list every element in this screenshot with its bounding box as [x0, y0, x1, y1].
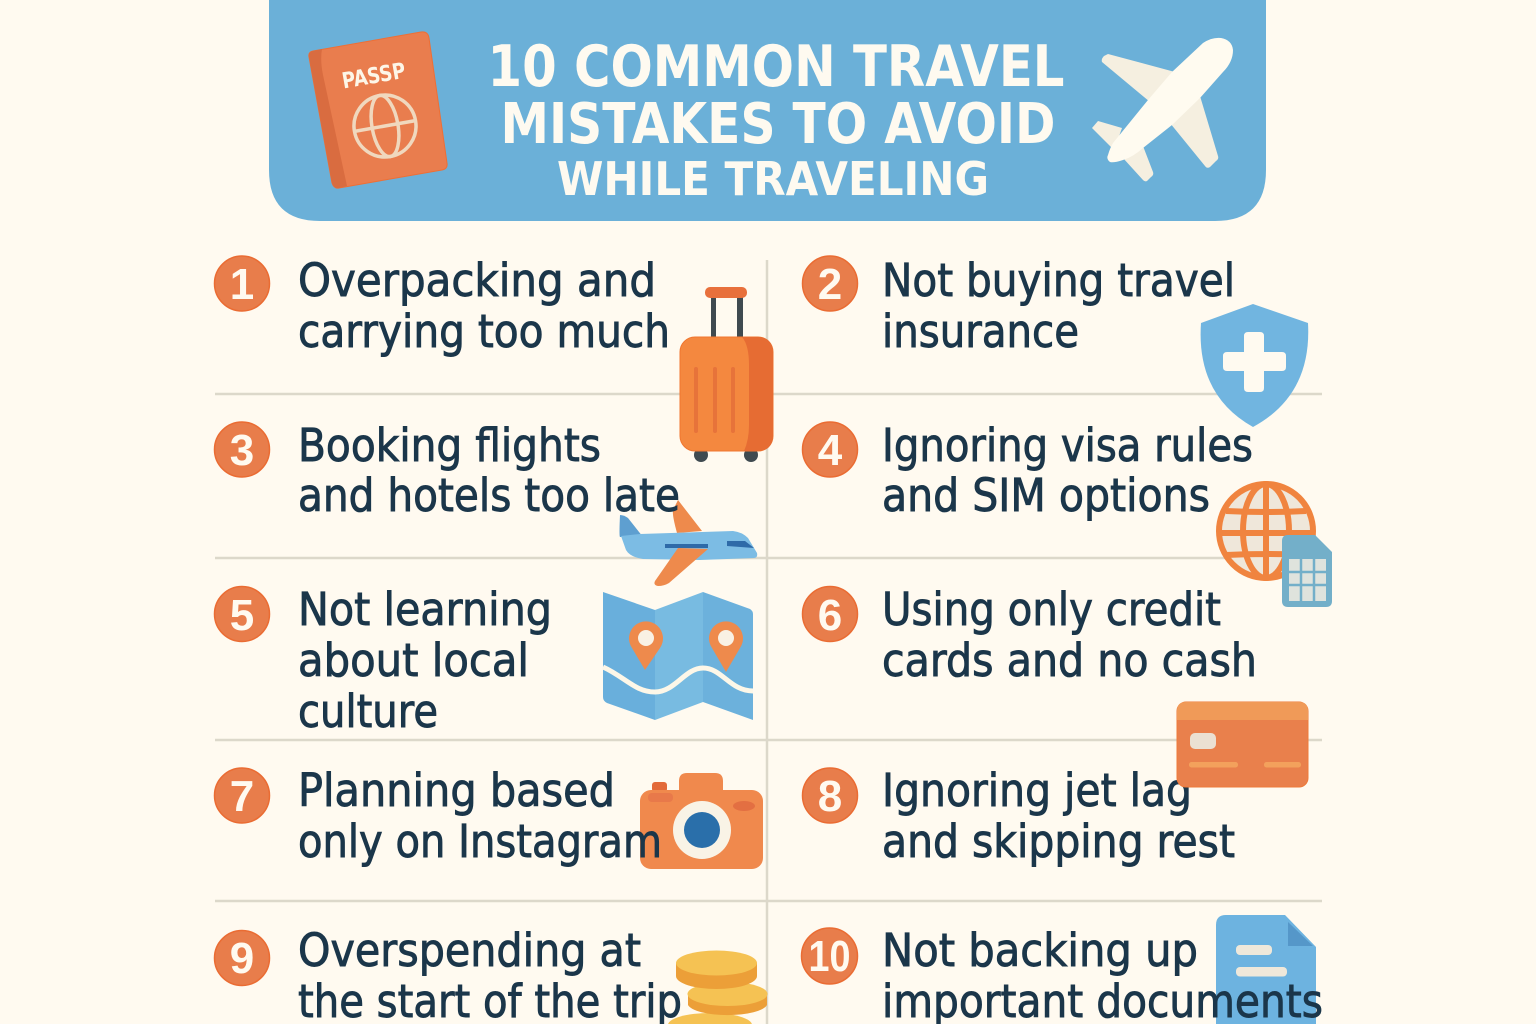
item 3: 3 — [230, 426, 254, 475]
item 7: Planning based — [298, 764, 615, 817]
item 5: culture — [298, 685, 438, 738]
title: WHILE TRAVELING — [557, 152, 989, 206]
icon: camera — [640, 773, 763, 869]
item 7: 7 — [230, 772, 254, 821]
item 1 — [214, 254, 670, 358]
item 3 — [214, 419, 680, 522]
item 4: 4 — [818, 426, 843, 475]
item 1: 1 — [230, 260, 254, 309]
icon: map with pins — [603, 592, 753, 720]
icon: passport — [309, 32, 447, 188]
item 2: 2 — [818, 260, 842, 309]
title — [488, 34, 1064, 206]
item 6: cards and no cash — [882, 634, 1257, 687]
item 8 — [802, 764, 1235, 868]
item 3: and hotels too late — [298, 469, 680, 522]
item 3: Booking flights — [298, 419, 601, 472]
item 9 — [214, 924, 682, 1024]
item 10: 10 — [808, 932, 850, 981]
icon: suitcase — [680, 287, 773, 462]
item 4: Ignoring visa rules — [882, 419, 1253, 472]
item 5 — [214, 583, 552, 738]
item 4: and SIM options — [882, 469, 1210, 522]
item 6: 6 — [818, 591, 842, 640]
item 8: Ignoring jet lag — [882, 764, 1192, 817]
icon: coins — [668, 950, 768, 1024]
item 2: insurance — [882, 305, 1079, 358]
icon: small airplane — [620, 500, 757, 586]
item 2 — [802, 254, 1235, 358]
item 6 — [802, 583, 1257, 687]
icon: airplane — [1092, 38, 1233, 181]
item 10 — [802, 924, 1323, 1024]
item 4 — [802, 419, 1253, 522]
divider lines — [215, 260, 1322, 1024]
item 2: Not buying travel — [882, 254, 1235, 307]
item 5: about local — [298, 634, 529, 687]
item 9: Overspending at — [298, 924, 641, 977]
icon: globe and SIM card — [1219, 484, 1332, 607]
item 9: 9 — [230, 934, 254, 983]
item 5: 5 — [230, 591, 254, 640]
item 8: and skipping rest — [882, 815, 1235, 868]
icon: credit card — [1177, 702, 1308, 787]
title: 10 COMMON TRAVEL — [488, 34, 1064, 100]
item 10: Not backing up — [882, 924, 1198, 977]
item 1: carrying too much — [298, 305, 670, 358]
icon: document — [1216, 915, 1316, 1024]
title: MISTAKES TO AVOID — [500, 92, 1056, 157]
icon: shield with cross — [1201, 304, 1308, 427]
item 8: 8 — [818, 772, 842, 821]
item 1: Overpacking and — [298, 254, 656, 307]
item 7: only on Instagram — [298, 815, 662, 868]
item 7 — [214, 764, 662, 868]
item 6: Using only credit — [882, 583, 1221, 636]
header banner — [269, 0, 1266, 221]
item 5: Not learning — [298, 583, 552, 636]
icon: passport: PASSP — [340, 59, 408, 94]
